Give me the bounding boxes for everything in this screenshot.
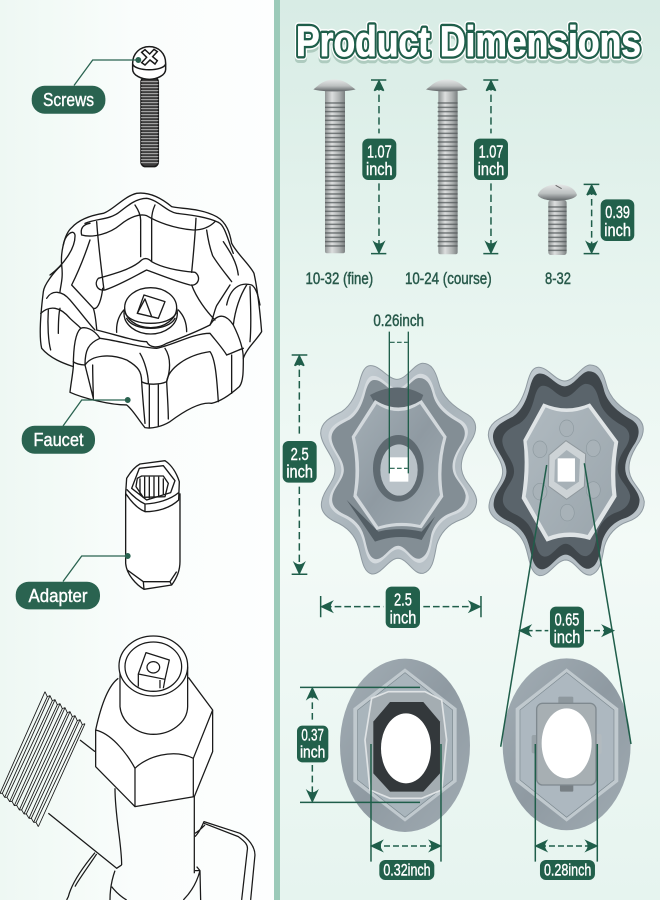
dimension: 0.39 inch: 0.39 bbox=[605, 202, 630, 222]
callout: 0.26inch hole width: 0.26inch bbox=[373, 311, 424, 330]
label: Faucet: Faucet bbox=[34, 430, 84, 450]
dimension: 2.5 inch height: 2.5 bbox=[291, 444, 309, 464]
icon: faucet knob line drawing bbox=[40, 193, 262, 428]
label: 8-32: 8-32 bbox=[545, 269, 571, 288]
photo: screw 8-32 bbox=[538, 184, 577, 255]
icon: faucet valve line drawing bbox=[0, 636, 255, 900]
dimension: 0.37 inch: inch bbox=[300, 742, 325, 761]
label: 10-32 (fine): 10-32 (fine) bbox=[305, 269, 373, 288]
leader lines: 0.65 inch span bbox=[501, 463, 631, 747]
dimension: 2.5 inch width: inch bbox=[390, 607, 416, 627]
dimension: 0.39 inch: inch bbox=[604, 220, 631, 240]
dimension: 0.28inch bbox=[535, 744, 597, 880]
label: Screws bbox=[32, 86, 105, 114]
dimension: 2.5 inch height bbox=[283, 355, 317, 574]
callout: faucet leader line bbox=[63, 398, 130, 426]
dimension: 0.28inch: 0.28inch bbox=[544, 861, 591, 880]
label: Screws: Screws bbox=[43, 90, 94, 110]
callout: 0.26inch hole width bbox=[373, 311, 424, 473]
photo: knob back view bbox=[488, 365, 644, 576]
label: 10-24 (course): 10-24 (course) bbox=[405, 269, 492, 288]
photo: screw 10-24 course bbox=[426, 79, 468, 254]
divider band bbox=[274, 0, 280, 900]
photo: screw 10-32 fine bbox=[313, 79, 356, 253]
photo: adapter left bbox=[340, 659, 470, 832]
dimension: 0.39 inch bbox=[584, 184, 634, 254]
dimension: 0.65 inch: 0.65 bbox=[555, 609, 579, 629]
dimension: 0.32inch: 0.32inch bbox=[383, 861, 431, 880]
panel: product parts line art bbox=[0, 47, 262, 900]
panel: adapter dimensions bbox=[297, 607, 631, 880]
label: Adapter: Adapter bbox=[28, 586, 88, 606]
callout: adapter leader line bbox=[63, 554, 130, 582]
dimension: 0.65 inch bbox=[520, 607, 613, 648]
label: Faucet bbox=[22, 426, 95, 454]
dimension: 1.07 inch: 1.07 bbox=[479, 141, 503, 161]
dimension: 0.32inch bbox=[371, 744, 441, 880]
dimension: 1.07 inch bbox=[362, 80, 396, 254]
dimension: 1.07 inch: 1.07 bbox=[367, 141, 392, 161]
dimension: 2.5 inch width: 2.5 bbox=[394, 590, 412, 610]
dimension: 1.07 inch: inch bbox=[478, 159, 504, 179]
panel: left background bbox=[0, 0, 275, 900]
photo: adapter right bbox=[503, 658, 631, 830]
label: Adapter bbox=[16, 582, 100, 609]
dimension: 2.5 inch height: inch bbox=[286, 462, 313, 482]
panel: knob dimensions bbox=[283, 311, 644, 628]
dimension: 0.37 inch bbox=[297, 687, 420, 802]
icon: screw line drawing bbox=[133, 47, 166, 167]
dimension: 2.5 inch width bbox=[321, 587, 481, 628]
dimension: 1.07 inch: inch bbox=[366, 159, 393, 179]
photo: knob front view bbox=[321, 363, 477, 574]
dimension: 0.37 inch: 0.37 bbox=[301, 726, 324, 745]
callout: screws leader line bbox=[74, 58, 141, 86]
panel: screw dimensions bbox=[305, 79, 634, 288]
panel: right background bbox=[279, 0, 660, 900]
dimension: 1.07 inch bbox=[474, 80, 508, 254]
icon: adapter line drawing bbox=[126, 461, 180, 589]
dimension: 0.65 inch: inch bbox=[554, 627, 580, 647]
